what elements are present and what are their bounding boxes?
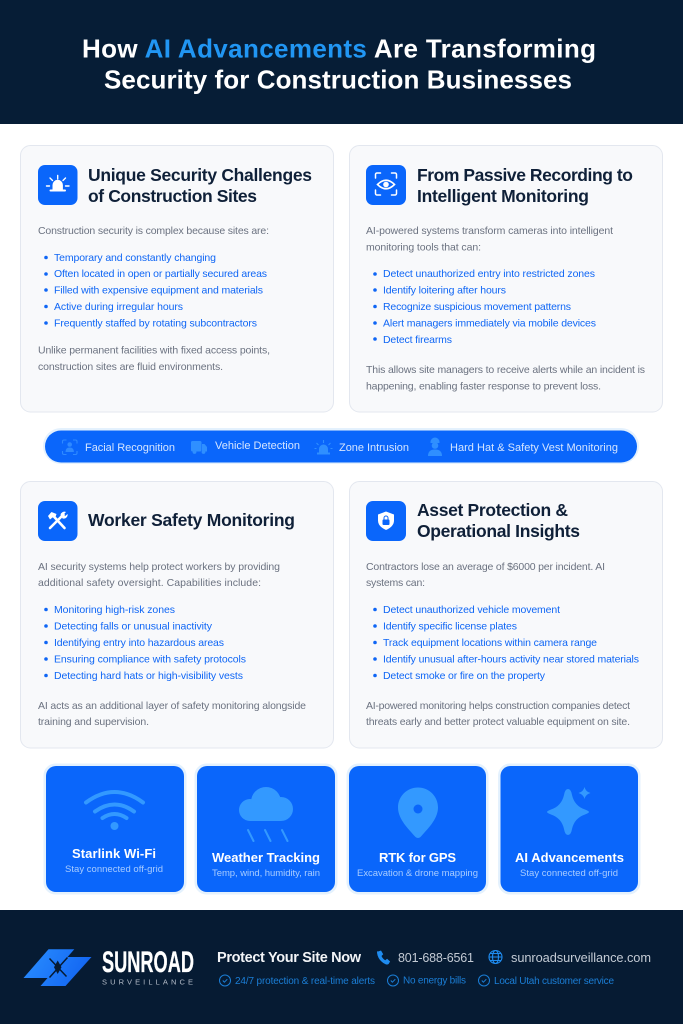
label: hard hat and vest monitoring: Hard Hat & Safety Vest Monitoring xyxy=(450,442,618,454)
bullet list xyxy=(373,268,596,346)
bullet list: Detecting hard hats or high-visibility vests xyxy=(54,670,243,682)
heading xyxy=(417,165,633,206)
benefit: local service: Local Utah customer service xyxy=(494,976,614,987)
heading: Worker Safety Monitoring xyxy=(88,510,295,530)
closing text: Unlike permanent facilities with fixed access points, xyxy=(38,344,270,356)
tile subtitle: Temp, wind, humidity, rain xyxy=(212,868,320,879)
bullet list: Track equipment locations within camera range xyxy=(383,637,597,649)
closing text: AI acts as an additional layer of safety monitoring alongside xyxy=(38,700,306,712)
icon: shield lock xyxy=(366,501,406,541)
benefit: protection: 24/7 protection & real-time alerts xyxy=(235,976,375,987)
bullet list: Active during irregular hours xyxy=(54,301,183,313)
closing text: threats early and better protect valuable equipment on site. xyxy=(366,716,630,728)
icon: map pin xyxy=(398,788,438,838)
bullet list: Ensuring compliance with safety protocols xyxy=(54,654,246,666)
icon: facial recognition xyxy=(62,440,77,454)
icon: crossed tools xyxy=(38,501,78,541)
bullet list: Alert managers immediately via mobile devices xyxy=(383,318,596,330)
bullet list: Identify specific license plates xyxy=(383,620,517,632)
website: sunroadsurveillance.com xyxy=(511,950,651,965)
heading: Unique Security Challenges xyxy=(88,165,312,185)
logo wordmark: SUNROAD xyxy=(102,946,194,979)
intro text xyxy=(366,225,613,254)
title: How AI Advancements Are Transforming xyxy=(82,34,596,64)
closing text: AI-powered monitoring helps construction companies detect xyxy=(366,700,630,712)
bullet list xyxy=(44,604,246,682)
intro text xyxy=(366,561,605,589)
icon: wifi xyxy=(86,792,143,830)
intro text: Contractors lose an average of $6000 per incident. AI xyxy=(366,561,605,573)
heading: of Construction Sites xyxy=(88,186,257,206)
bullet list xyxy=(373,604,639,682)
tile: ai advancements xyxy=(498,764,640,894)
label: facial recognition: Facial Recognition xyxy=(85,442,175,454)
bullet list: Detect smoke or fire on the property xyxy=(383,670,546,682)
bullet list: Detect unauthorized vehicle movement xyxy=(383,604,560,616)
tile: rtk for gps xyxy=(346,764,488,894)
intro text: monitoring tools that can: xyxy=(366,242,481,254)
bullet list: Identify loitering after hours xyxy=(383,284,506,296)
tile subtitle: Stay connected off-grid xyxy=(520,868,618,879)
benefit: no energy bills: No energy bills xyxy=(403,976,466,986)
intro text: AI-powered systems transform cameras into intelligent xyxy=(366,225,613,237)
footer xyxy=(0,910,683,1024)
bullet list: Identifying entry into hazardous areas xyxy=(54,637,224,649)
logo wordmark: SURVEILLANCE xyxy=(102,978,193,986)
intro text xyxy=(38,561,280,589)
bullet list: Filled with expensive equipment and materials xyxy=(54,284,263,296)
tile title: RTK for GPS xyxy=(379,850,456,865)
closing text: construction sites are fluid environments. xyxy=(38,361,223,373)
icon: sparkles xyxy=(547,787,590,835)
logo wordmark xyxy=(102,946,194,986)
heading: Intelligent Monitoring xyxy=(417,186,589,206)
call to action: Protect Your Site Now xyxy=(217,950,362,966)
bullet list: Detect unauthorized entry into restricted zones xyxy=(383,268,595,280)
icon: truck xyxy=(191,441,207,454)
icon: eye scan xyxy=(366,165,406,205)
title: Security for Construction Businesses xyxy=(104,64,572,94)
icon: globe xyxy=(489,950,502,964)
title xyxy=(82,34,596,94)
heading: From Passive Recording to xyxy=(417,165,633,185)
tile title: Starlink Wi-Fi xyxy=(72,846,156,861)
bullet list: Recognize suspicious movement patterns xyxy=(383,301,571,313)
intro text: systems can: xyxy=(366,577,425,589)
tile title: Weather Tracking xyxy=(212,850,320,865)
closing text xyxy=(38,700,306,728)
bullet list: Temporary and constantly changing xyxy=(54,252,216,264)
tile subtitle: Excavation & drone mapping xyxy=(357,868,478,879)
closing text xyxy=(366,364,645,392)
tile: starlink wi-fi xyxy=(44,764,186,894)
feature pill bar xyxy=(43,428,639,464)
bullet list: Detecting falls or unusual inactivity xyxy=(54,620,213,632)
label: vehicle detection: Vehicle Detection xyxy=(215,440,300,452)
closing text: happening, enabling faster response to prevent loss. xyxy=(366,380,601,392)
closing text: This allows site managers to receive alerts while an incident is xyxy=(366,364,645,376)
header banner xyxy=(0,0,683,124)
bullet list: Often located in open or partially secured areas xyxy=(54,268,267,280)
closing text: training and supervision. xyxy=(38,716,149,728)
tile title: AI Advancements xyxy=(515,850,624,865)
closing text xyxy=(366,700,630,728)
tile subtitle: Stay connected off-grid xyxy=(65,864,163,875)
panel: intelligent monitoring xyxy=(350,146,662,412)
panel: worker safety monitoring xyxy=(20,482,334,748)
icon: rain cloud xyxy=(239,787,293,841)
tile: weather tracking xyxy=(194,764,338,894)
logo mark xyxy=(24,949,92,986)
heading xyxy=(417,500,580,541)
icon: hard hat worker xyxy=(428,438,442,456)
heading: Asset Protection & xyxy=(417,500,568,520)
intro text: Construction security is complex because sites are: xyxy=(38,225,269,237)
intro text: AI security systems help protect workers by providing xyxy=(38,561,280,573)
bullet list: Frequently staffed by rotating subcontractors xyxy=(54,318,257,330)
phone number: 801-688-6561 xyxy=(398,951,474,965)
closing text xyxy=(38,344,270,373)
icon: alert beacon xyxy=(38,165,78,205)
bullet list: Detect firearms xyxy=(383,334,452,346)
heading: Operational Insights xyxy=(417,521,580,541)
bullet list: Monitoring high-risk zones xyxy=(54,604,175,616)
panel: unique security challenges xyxy=(20,146,334,412)
icon: zone beacon xyxy=(314,440,332,454)
label: zone intrusion: Zone Intrusion xyxy=(339,442,409,454)
icon: phone xyxy=(377,950,390,964)
panel: asset protection xyxy=(350,482,662,748)
intro text: additional safety oversight. Capabilities include: xyxy=(38,577,261,589)
heading xyxy=(88,165,312,206)
bullet list: Identify unusual after-hours activity near stored materials xyxy=(383,654,639,666)
bullet list xyxy=(44,252,267,330)
